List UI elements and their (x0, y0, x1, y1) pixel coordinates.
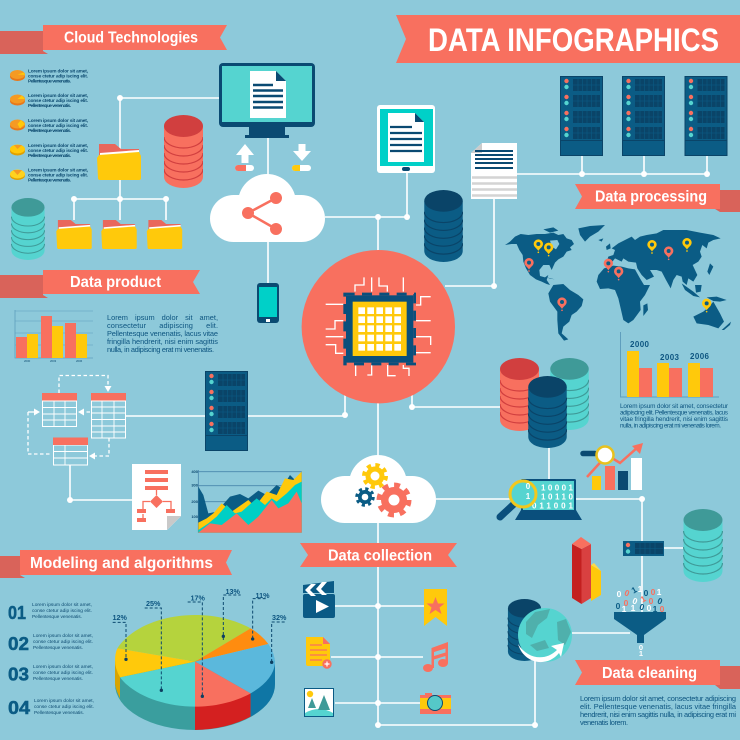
icon: main folder (97, 144, 141, 180)
pie item 5: Lorem ipsum dolor sit amet, (28, 168, 89, 174)
text block: data cleaning: venenatis lorem. (580, 718, 628, 727)
icon: laptop with magnifier: 0 (526, 482, 531, 491)
icon: funnel with binary digits: 0 (639, 643, 643, 652)
pie item 2: Pellentesque venenatis. (28, 103, 71, 109)
icon: funnel with binary digits: 1 (629, 584, 639, 596)
gear coral (379, 485, 409, 515)
text block: data processing: vitae fringilla hendrerit, nisi enim sagittis (620, 416, 728, 423)
pie item 3: conse ctetur adip iscing elit. (28, 123, 88, 129)
item 01: conse ctetur adip iscing elit. (32, 608, 92, 614)
icon: funnel with binary digits: 0 (638, 602, 646, 613)
map pin: coral South America (557, 297, 567, 311)
map pin: yellow Australia (702, 299, 711, 312)
pie item 5: conse ctetur adip iscing elit. (28, 172, 88, 178)
pie labels: 17% (190, 594, 205, 602)
icon: image frame (304, 688, 334, 716)
icon: 3D bar (572, 537, 601, 604)
list: pie icons with text (10, 68, 89, 184)
pie item 1 (10, 68, 89, 84)
map pin: yellow Russia (647, 240, 657, 254)
heading: Modeling and algorithms: Modeling and algorithms (30, 555, 213, 572)
pie labels: 12% (112, 613, 127, 622)
map pin: coral Central Asia (664, 246, 673, 260)
heading: Modeling and algorithms (0, 550, 232, 578)
icon: funnel with binary digits: 0 (644, 588, 649, 598)
area chart: 100 (191, 514, 199, 519)
pie labels: 32% (272, 613, 287, 622)
pie slice: blue (195, 644, 275, 693)
icon: navy database (424, 190, 463, 262)
icon: funnel with binary digits: 0 (617, 589, 622, 599)
pie item 2: Lorem ipsum dolor sit amet, (28, 93, 89, 99)
item 04: Pellentesque venenatis. (34, 710, 84, 716)
icon: teal database (11, 198, 45, 260)
pie item 5: Pellentesque venenatis. (28, 178, 71, 184)
icon: database stack (500, 358, 589, 448)
icon: database and globe (508, 599, 572, 662)
item 04 (8, 697, 94, 718)
pie labels (112, 587, 287, 622)
text block: data processing (620, 403, 729, 430)
pie item 3: Lorem ipsum dolor sit amet, (28, 118, 89, 124)
area chart: 300 (191, 482, 199, 487)
icon: folder 1 (56, 220, 92, 249)
item 03: Pellentesque venenatis. (33, 676, 83, 682)
heading: Cloud Technologies (0, 25, 227, 54)
bar chart: data product (15, 310, 93, 363)
numbered list (8, 602, 94, 718)
item 02: Lorem ipsum dolor sit amet, (33, 633, 93, 639)
item 04: 04 (8, 697, 31, 718)
icon: upload arrow (235, 144, 254, 171)
item 01: 01 (8, 602, 26, 623)
gear navy (357, 489, 373, 505)
pie item 2 (10, 93, 89, 109)
icon: funnel with binary digits: 0 (649, 596, 654, 606)
map pin: coral Mexico (524, 258, 534, 272)
pie labels: 13% (226, 587, 240, 596)
icon: stacked documents (471, 143, 517, 199)
icon: teal database right (684, 509, 722, 582)
icon: laptop with magnifier: 10110 (541, 492, 574, 502)
pie sides (115, 661, 275, 730)
icon: flowchart document (132, 464, 181, 530)
icon: funnel with binary digits: 0 (624, 598, 629, 608)
icon: funnel with binary digits: 0 (631, 595, 639, 607)
pie item 4: Pellentesque venenatis. (28, 153, 71, 159)
icon: funnel with binary digits: 1 (653, 604, 658, 614)
world map (505, 225, 731, 341)
map pin: coral Sahara (614, 267, 623, 280)
item 02 (8, 633, 93, 654)
central processor circle (302, 250, 455, 403)
pie labels: 11% (256, 591, 270, 600)
pie slice: green (117, 615, 251, 662)
icon: bookmark star (424, 589, 447, 626)
icon: funnel with binary digits: 1 (631, 603, 636, 613)
item 04: Lorem ipsum dolor sit amet, (34, 698, 94, 704)
icon: gears cloud (321, 455, 436, 523)
bar chart: data product: 2003 (50, 359, 57, 363)
bar chart: data product: 2000 (24, 359, 31, 363)
map pin: yellow Siberia (682, 238, 692, 252)
text block: data product: fringilla hendrerit, nisi enim sagittis (107, 337, 218, 346)
table 2 (91, 393, 126, 438)
map pin: yellow East US (544, 243, 553, 256)
diagram: data tables with dashed arrows (28, 376, 126, 465)
map pin: coral North Africa (604, 259, 613, 272)
icon: video clapper (303, 581, 335, 618)
item 04: conse ctetur adip iscing elit. (34, 704, 94, 710)
text block: data cleaning: elit. Pellentesque venenatis, lacus vitae fringilla (580, 702, 737, 711)
heading: Data processing: Data processing (595, 188, 707, 206)
text block: data cleaning: Lorem ipsum dolor sit amet, consectetur adipiscing (580, 694, 736, 703)
item 02: Pellentesque venenatis. (33, 645, 83, 651)
icon: funnel with binary digits: 0 (623, 587, 631, 599)
pie callout lines (113, 595, 285, 696)
icon: server 3 (684, 76, 728, 156)
bar chart: years: 2006 (690, 352, 710, 361)
item 03: Lorem ipsum dolor sit amet, (33, 664, 93, 670)
icon: folder 2 (101, 220, 137, 249)
icon: rack unit (623, 541, 664, 556)
icon: laptop with magnifier (500, 479, 582, 520)
pie item 1: Lorem ipsum dolor sit amet, (28, 68, 89, 74)
pie chart (112, 587, 287, 730)
item 03 (8, 664, 93, 684)
pie slice: yellow (115, 648, 195, 677)
icon: folder 3 (147, 220, 182, 249)
text block: data product (107, 313, 218, 354)
pie item 1: Pellentesque venenatis. (28, 78, 71, 84)
pie slice: teal (120, 662, 195, 707)
item 01: Pellentesque venenatis. (32, 614, 82, 620)
icon: funnel with binary digits: 1 (622, 604, 627, 614)
heading: Cloud Technologies: Cloud Technologies (64, 30, 198, 46)
heading: Data cleaning: Data cleaning (602, 665, 697, 682)
gear yellow (364, 465, 386, 487)
icon: laptop with magnifier: 011001 (532, 502, 574, 510)
icon: funnel with binary digits: 0 (647, 603, 652, 613)
icon: download arrow (292, 144, 311, 171)
area chart (191, 469, 302, 533)
icon: funnel with binary digits: 1 (638, 584, 643, 594)
text block: data cleaning (580, 694, 737, 727)
pie item 3: Pellentesque venenatis. (28, 128, 71, 134)
heading: Data collection: Data collection (328, 548, 432, 564)
text block: data product: nulla, in adipiscing erat mi venenatis. (107, 345, 214, 354)
text block: data cleaning: hendrerit, nisi enim sagittis nulla, in adipiscing erat mi (580, 710, 736, 719)
icon: tablet with document (377, 105, 435, 173)
item 02: conse ctetur adip iscing elit. (33, 639, 93, 645)
text block: data product: Pellentesque venenatis, lacus vitae (107, 329, 218, 338)
icon: monitor with document (219, 63, 315, 138)
icon: analytics chart with magnifier (583, 443, 643, 490)
text block: data processing: Lorem ipsum dolor sit amet, consectetur (620, 403, 729, 410)
icon: funnel with binary digits: 0 (660, 604, 665, 614)
icon: funnel with binary digits (614, 584, 666, 658)
pie item 4 (10, 143, 89, 159)
icon: coral database (164, 115, 203, 188)
icon: server 1 (560, 76, 603, 156)
icon: laptop with magnifier: 1 (526, 492, 531, 501)
icon: smartphone (257, 283, 279, 323)
item 01: Lorem ipsum dolor sit amet, (32, 602, 92, 608)
item 03: 03 (8, 664, 29, 684)
heading: Data product: Data product (70, 274, 161, 291)
pie item 4: Lorem ipsum dolor sit amet, (28, 143, 89, 149)
heading: Data collection (300, 543, 457, 567)
icon: funnel with binary digits: 1 (638, 593, 648, 605)
text block: data processing: nulla, in adipiscing erat mi venenatis lorem. (620, 422, 721, 430)
text block: data processing: adipiscing elit. Pellentesque venenatis, lacus (620, 410, 728, 416)
icon: funnel with binary digits: 0 (651, 587, 656, 597)
icon: server 2 (622, 76, 665, 156)
item 01 (8, 602, 92, 623)
connector dots (67, 95, 710, 728)
bar chart: data product: 2006 (76, 359, 83, 363)
table 3 (53, 438, 88, 465)
title banner (396, 15, 740, 63)
icon: server middle (205, 371, 248, 451)
text block: data product: Lorem ipsum dolor sit amet, (107, 313, 218, 322)
item 03: conse ctetur adip iscing elit. (33, 670, 93, 676)
icon: document add (306, 637, 332, 669)
area chart: 200 (191, 499, 199, 504)
pie slice: coral (195, 662, 251, 707)
map pin: yellow North America (534, 239, 543, 253)
heading: Data processing (575, 184, 740, 212)
pie item 2: conse ctetur adip iscing elit. (28, 98, 88, 104)
icon: funnel with binary digits: 1 (657, 587, 662, 597)
bar chart: years: 2000 (630, 340, 650, 349)
icon: funnel with binary digits: 0 (656, 595, 664, 607)
heading: Data product (0, 270, 200, 298)
area chart: 400 (191, 469, 199, 474)
pie slice: orange (195, 628, 268, 662)
pie item 3 (10, 118, 89, 134)
pie item 5 (10, 168, 89, 184)
bar chart: years: 2003 (660, 353, 680, 362)
text block: data product: consectetur adipiscing elit. (107, 321, 218, 330)
table 1 (42, 393, 77, 426)
icon: funnel with binary digits: 0 (616, 601, 621, 611)
icon: laptop with magnifier: 10001 (541, 484, 574, 492)
heading: Data cleaning (575, 660, 740, 689)
item 02: 02 (8, 633, 29, 654)
icon: camera (420, 693, 451, 714)
icon: funnel with binary digits: 1 (639, 649, 643, 658)
bar chart: years (620, 332, 719, 397)
pie item 1: conse ctetur adip iscing elit. (28, 74, 88, 80)
icon: music note (423, 642, 448, 672)
icon: share cloud (210, 174, 325, 242)
pie item 4: conse ctetur adip iscing elit. (28, 148, 88, 154)
connector lines (70, 98, 707, 725)
pie labels: 25% (146, 599, 161, 608)
